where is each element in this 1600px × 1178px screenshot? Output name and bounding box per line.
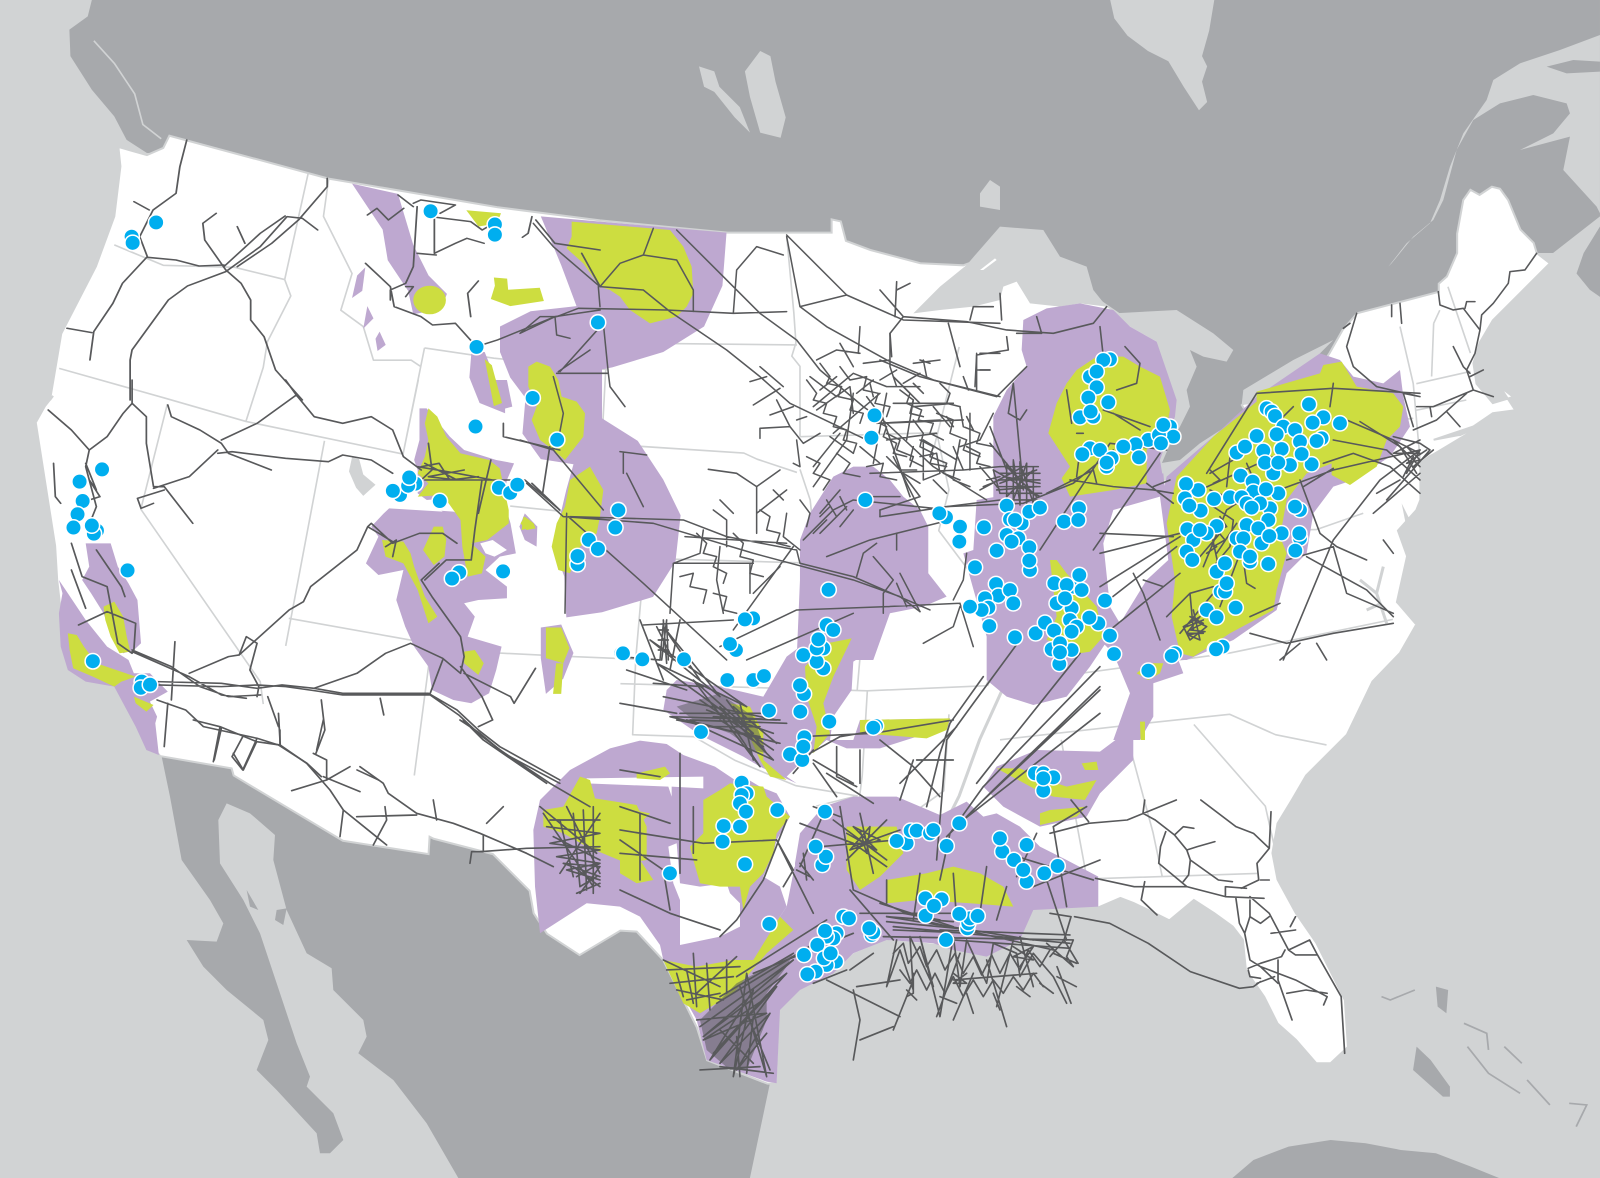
lakes: Superior and Huron and Erie (913, 180, 1257, 480)
shale plays: purple Illinois and Appalachian (963, 440, 1183, 740)
state boundaries (59, 173, 1470, 879)
sites: western and northern markers (66, 203, 882, 696)
green fields: Montana and Rockies (413, 210, 569, 694)
sites: midcontinent and Gulf markers (615, 617, 1065, 982)
St Lawrence river and gulf (1388, 35, 1600, 460)
pipelines: Pacific Northwest and northern Rockies (67, 140, 600, 400)
white gaps: Utah basin (393, 498, 507, 557)
pipelines: Oklahoma, Arkansas, Texas and Gulf (620, 620, 1100, 1077)
pipeline core: dense Oklahoma bundle (677, 693, 767, 753)
shale plays: green oil and gas fields (68, 210, 1403, 1013)
white gap: central Appalachia foreland (1103, 497, 1168, 623)
white gaps: Texas (587, 777, 795, 945)
sites: Michigan markers (1072, 352, 1181, 474)
shale plays: purple basins west (59, 380, 537, 755)
pipelines: Southeast (1050, 800, 1345, 1053)
shale plays: purple basins north and Rockies (352, 184, 727, 694)
pipeline core: dense South Texas bundle (700, 953, 793, 1070)
green fields: Texas and Gulf states (543, 638, 1098, 1013)
land: contiguous United States (36, 136, 1550, 1084)
pipelines: West and Southwest (48, 380, 560, 783)
land: Mexico and Baja California (162, 753, 770, 1178)
pipelines: Plains and Upper Midwest (520, 223, 1000, 660)
land: Canada (69, 0, 1600, 490)
green fields: Bakken, Powder River, DJ (522, 222, 693, 573)
pipelines: Chicago, Ohio valley and Michigan (880, 282, 1173, 550)
pipelines: Southwest to Permian (193, 720, 600, 893)
green fields: Appalachian (1167, 362, 1403, 657)
shale plays: purple midcontinent and Gulf (797, 467, 947, 660)
sites: Illinois basin markers (932, 498, 1223, 678)
green fields: California and Utah (68, 408, 536, 712)
pipelines (48, 140, 1537, 1077)
pipelines: Appalachia and Northeast (1100, 383, 1420, 660)
sites: Appalachian markers (1177, 397, 1348, 657)
green fields: Michigan (1048, 357, 1170, 497)
green fields: Illinois basin (1047, 560, 1163, 740)
lake: Ontario and Atlantic bays (1242, 340, 1420, 623)
land: Cuba and the Bahamas (1232, 987, 1587, 1178)
